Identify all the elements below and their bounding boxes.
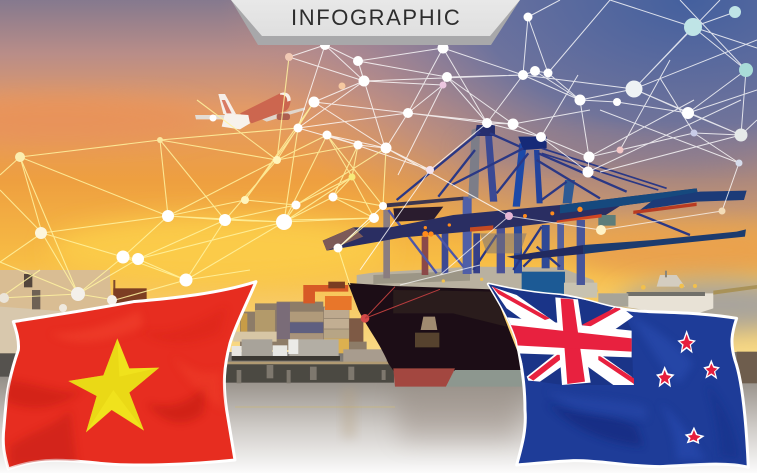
pale lines across the ship [338,206,722,285]
ship deck and containers [357,267,628,307]
white network lines [289,0,757,270]
container crane [323,125,747,285]
harbour water [0,352,757,473]
crane lights [422,207,583,237]
crane legs [383,197,585,285]
trucks [232,339,340,361]
yellow network lines [0,57,386,300]
airplane [195,93,305,129]
wings [195,107,305,122]
crane towers [468,125,575,207]
southern cross stars [656,330,720,444]
machinery house [598,215,616,226]
flag: New Zealand [488,284,748,467]
flag folds [547,313,740,460]
fuselage [240,93,291,123]
cargo containers and dock [224,282,394,383]
main boom [323,188,698,251]
orange harbour crane [303,282,352,310]
flag folds [3,307,227,467]
star outline and fill [677,330,696,353]
boom tip [640,191,747,210]
anchor [415,317,439,347]
lower boom [583,229,746,254]
union jack canton [488,284,634,385]
cross red [561,298,585,384]
crane stays [388,132,690,273]
cargo ship [348,267,628,387]
nodes [0,6,753,312]
boom underside glow [470,203,697,232]
water reflections [235,387,522,440]
background: sunset sky [0,0,757,360]
warehouse building left [0,270,147,377]
hull [348,283,525,371]
white ship at right [613,271,757,383]
title banner [231,0,520,45]
saltire red [492,286,550,320]
tail fin [218,94,236,114]
network of nodes and lines [0,0,757,312]
saltire white [492,287,634,385]
upper bar and machinery panel [387,197,463,222]
title text: INFOGRAPHIC [291,5,461,30]
hull waterline [393,368,455,387]
cross white [555,297,591,385]
flag: Vietnam [3,282,256,469]
engine [277,113,290,120]
star [68,338,159,432]
